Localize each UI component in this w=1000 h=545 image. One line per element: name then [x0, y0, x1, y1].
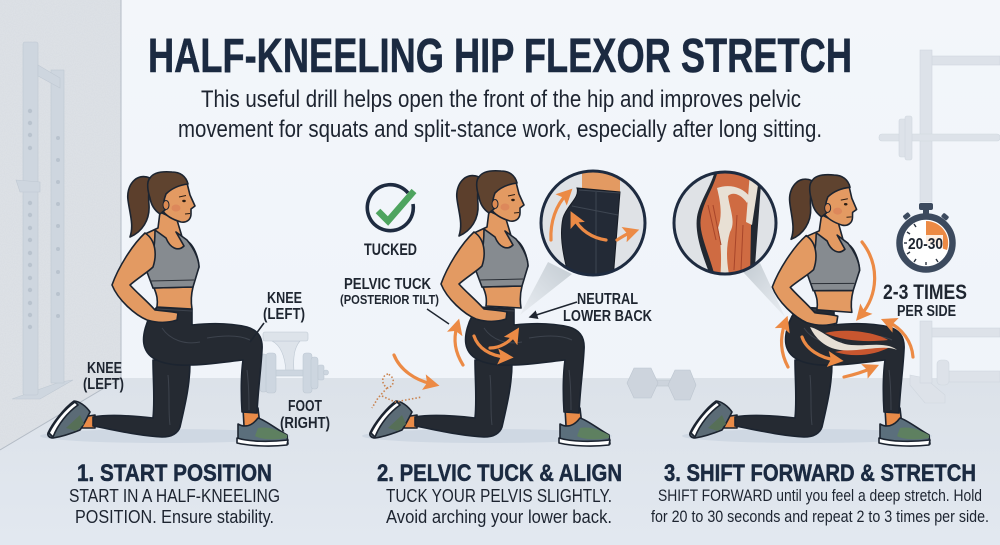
subtitle: movement for squats and split-stance work, especially after long sitting. — [178, 116, 822, 143]
step 2 caption: 2. PELVIC TUCK & ALIGN — [377, 460, 622, 487]
step 2 caption: TUCK YOUR PELVIS SLIGHTLY. — [386, 485, 612, 506]
callouts: step 1 labels: KNEE — [87, 360, 122, 377]
icon: stopwatch — [900, 203, 952, 270]
callouts: step 1 labels — [83, 290, 330, 432]
step 2 caption — [377, 460, 622, 527]
step 1 caption: 1. START POSITION — [77, 460, 272, 487]
callouts: step 2 labels: LOWER BACK — [563, 308, 652, 325]
gym rack: right — [879, 50, 1000, 403]
callouts: step 2 labels: NEUTRAL — [577, 291, 638, 308]
callouts: step 2 labels — [340, 276, 652, 325]
inset: pelvic tuck detail — [520, 165, 645, 315]
panel: step 1 figure — [40, 172, 290, 446]
callouts: step 2 labels: PELVIC TUCK — [344, 276, 431, 293]
step 1 caption: START IN A HALF-KNEELING — [69, 485, 280, 506]
icon: tucked check — [364, 185, 417, 259]
callouts: step 1 labels: FOOT — [288, 398, 322, 415]
callouts: step 1 labels: (LEFT) — [83, 376, 124, 393]
callouts: step 2 labels: (POSTERIOR TILT) — [340, 292, 439, 307]
dumbbell rack and dumbbell — [260, 332, 328, 393]
muscle overlay: thigh — [810, 327, 897, 355]
subtitle — [178, 86, 822, 143]
inset: muscle detail — [674, 170, 785, 317]
arrows: step 3 — [782, 242, 913, 377]
callout: reps: 2-3 TIMES — [883, 281, 967, 304]
gym rack: left — [12, 42, 73, 399]
callouts: step 1 labels: (LEFT) — [263, 306, 305, 323]
callouts: step 1 labels: KNEE — [267, 290, 302, 307]
icon: tucked check: TUCKED — [364, 241, 417, 259]
callouts: step 1 labels: (RIGHT) — [280, 415, 330, 432]
arrows: step 2 — [372, 326, 515, 408]
step 3 caption — [651, 460, 989, 526]
panel: step 2 figure — [362, 171, 612, 446]
panel: step 3 figure — [682, 174, 932, 446]
callout: reps — [883, 281, 967, 320]
hex dumbbell — [627, 368, 696, 400]
step 1 caption — [69, 460, 280, 527]
icon: stopwatch: 20-30 — [908, 236, 943, 253]
step 2 caption: Avoid arching your lower back. — [386, 506, 612, 527]
step 1 caption: POSITION. Ensure stability. — [75, 506, 274, 527]
callout: reps: PER SIDE — [897, 303, 956, 320]
subtitle: This useful drill helps open the front of the hip and improves pelvic — [201, 86, 801, 113]
